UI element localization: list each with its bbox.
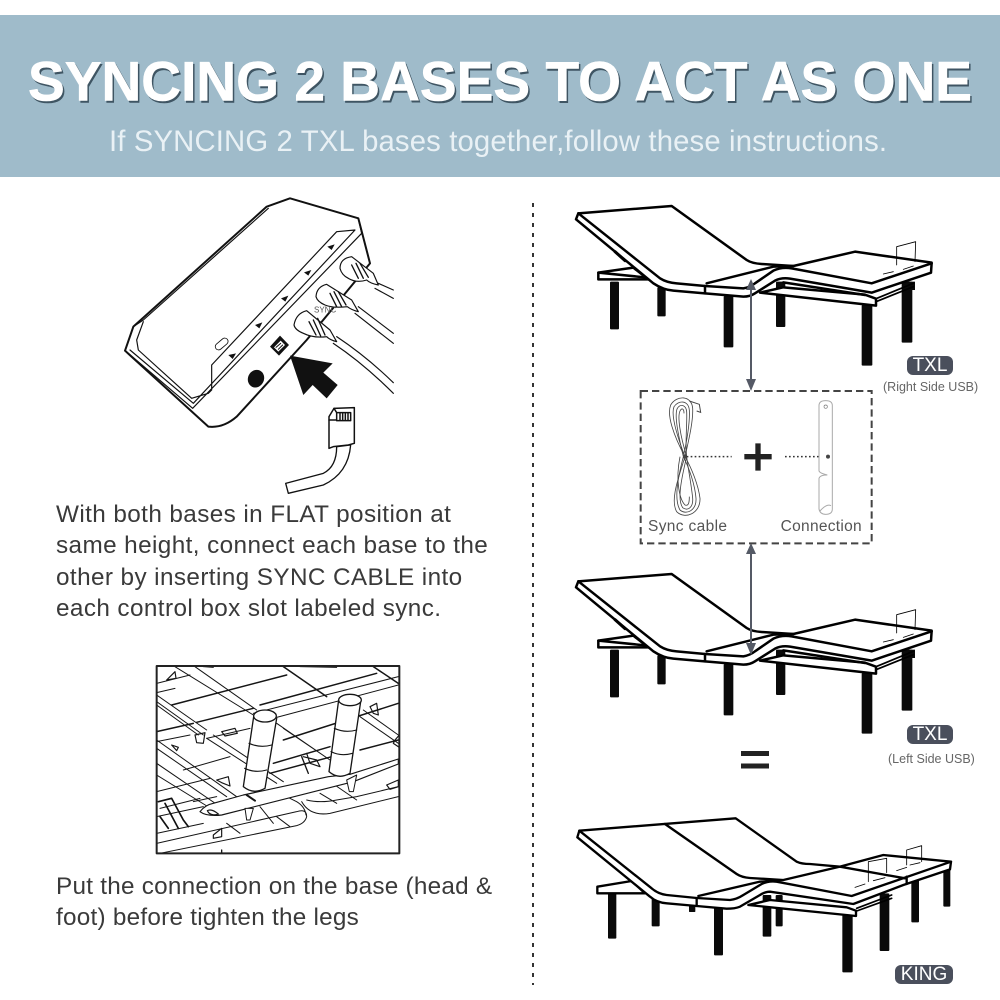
- label: right side USB: (Right Side USB): [883, 380, 978, 394]
- illustration: KING combined bases: [576, 817, 952, 972]
- illustration: connection on frame: [156, 665, 400, 854]
- badge: KING: KING: [901, 964, 947, 985]
- badge: TXL left: TXL: [913, 724, 947, 745]
- arrow: double headed upper: [746, 279, 756, 391]
- text block: step 1: each control box slot labeled sync.: [56, 595, 441, 622]
- illustration: TXL base left side USB: [574, 572, 933, 734]
- label: left side USB: (Left Side USB): [888, 752, 975, 766]
- title: SYNCING 2 BASES TO ACT AS ONE: [30, 52, 974, 114]
- text block: step 2: [56, 873, 492, 931]
- icon: plus: [744, 443, 772, 471]
- text block: step 1: With both bases in FLAT position at: [56, 501, 451, 528]
- connection bar: [200, 759, 398, 815]
- label: connection: Connection: [781, 518, 862, 535]
- subtitle: If SYNCING 2 TXL bases together,follow these instructions.: [109, 125, 887, 158]
- icon: bolt posts: [243, 694, 361, 791]
- label: sync cable: Sync cable: [648, 518, 727, 535]
- illustration: TXL base right side USB: [574, 204, 933, 366]
- icon: connection bracket: [819, 401, 832, 514]
- icon: RJ45 plug: [286, 408, 354, 493]
- icon: control box with sync cable: SYNC: [314, 306, 336, 315]
- text block: step 1: other by inserting SYNC CABLE into: [56, 564, 463, 591]
- arrow: double headed lower: [746, 544, 756, 655]
- equals sign: [741, 751, 769, 768]
- mesh slats: [157, 667, 398, 773]
- divider: [532, 203, 534, 985]
- icon: black arrow: [290, 356, 338, 398]
- text block: step 2: foot) before tighten the legs: [56, 904, 359, 931]
- text block: step 1: same height, connect each base to the: [56, 532, 488, 559]
- panel: sync kit: [640, 390, 873, 544]
- icon: control box with sync cable: [124, 197, 394, 494]
- text block: step 1: [56, 501, 488, 622]
- text block: step 2: Put the connection on the base (head &: [56, 873, 492, 900]
- icon: sync cable coil: [670, 398, 701, 515]
- header band: [0, 15, 1000, 177]
- title: SYNCING 2 BASES TO ACT AS ONE: [28, 50, 972, 112]
- badge: TXL right: TXL: [913, 355, 947, 376]
